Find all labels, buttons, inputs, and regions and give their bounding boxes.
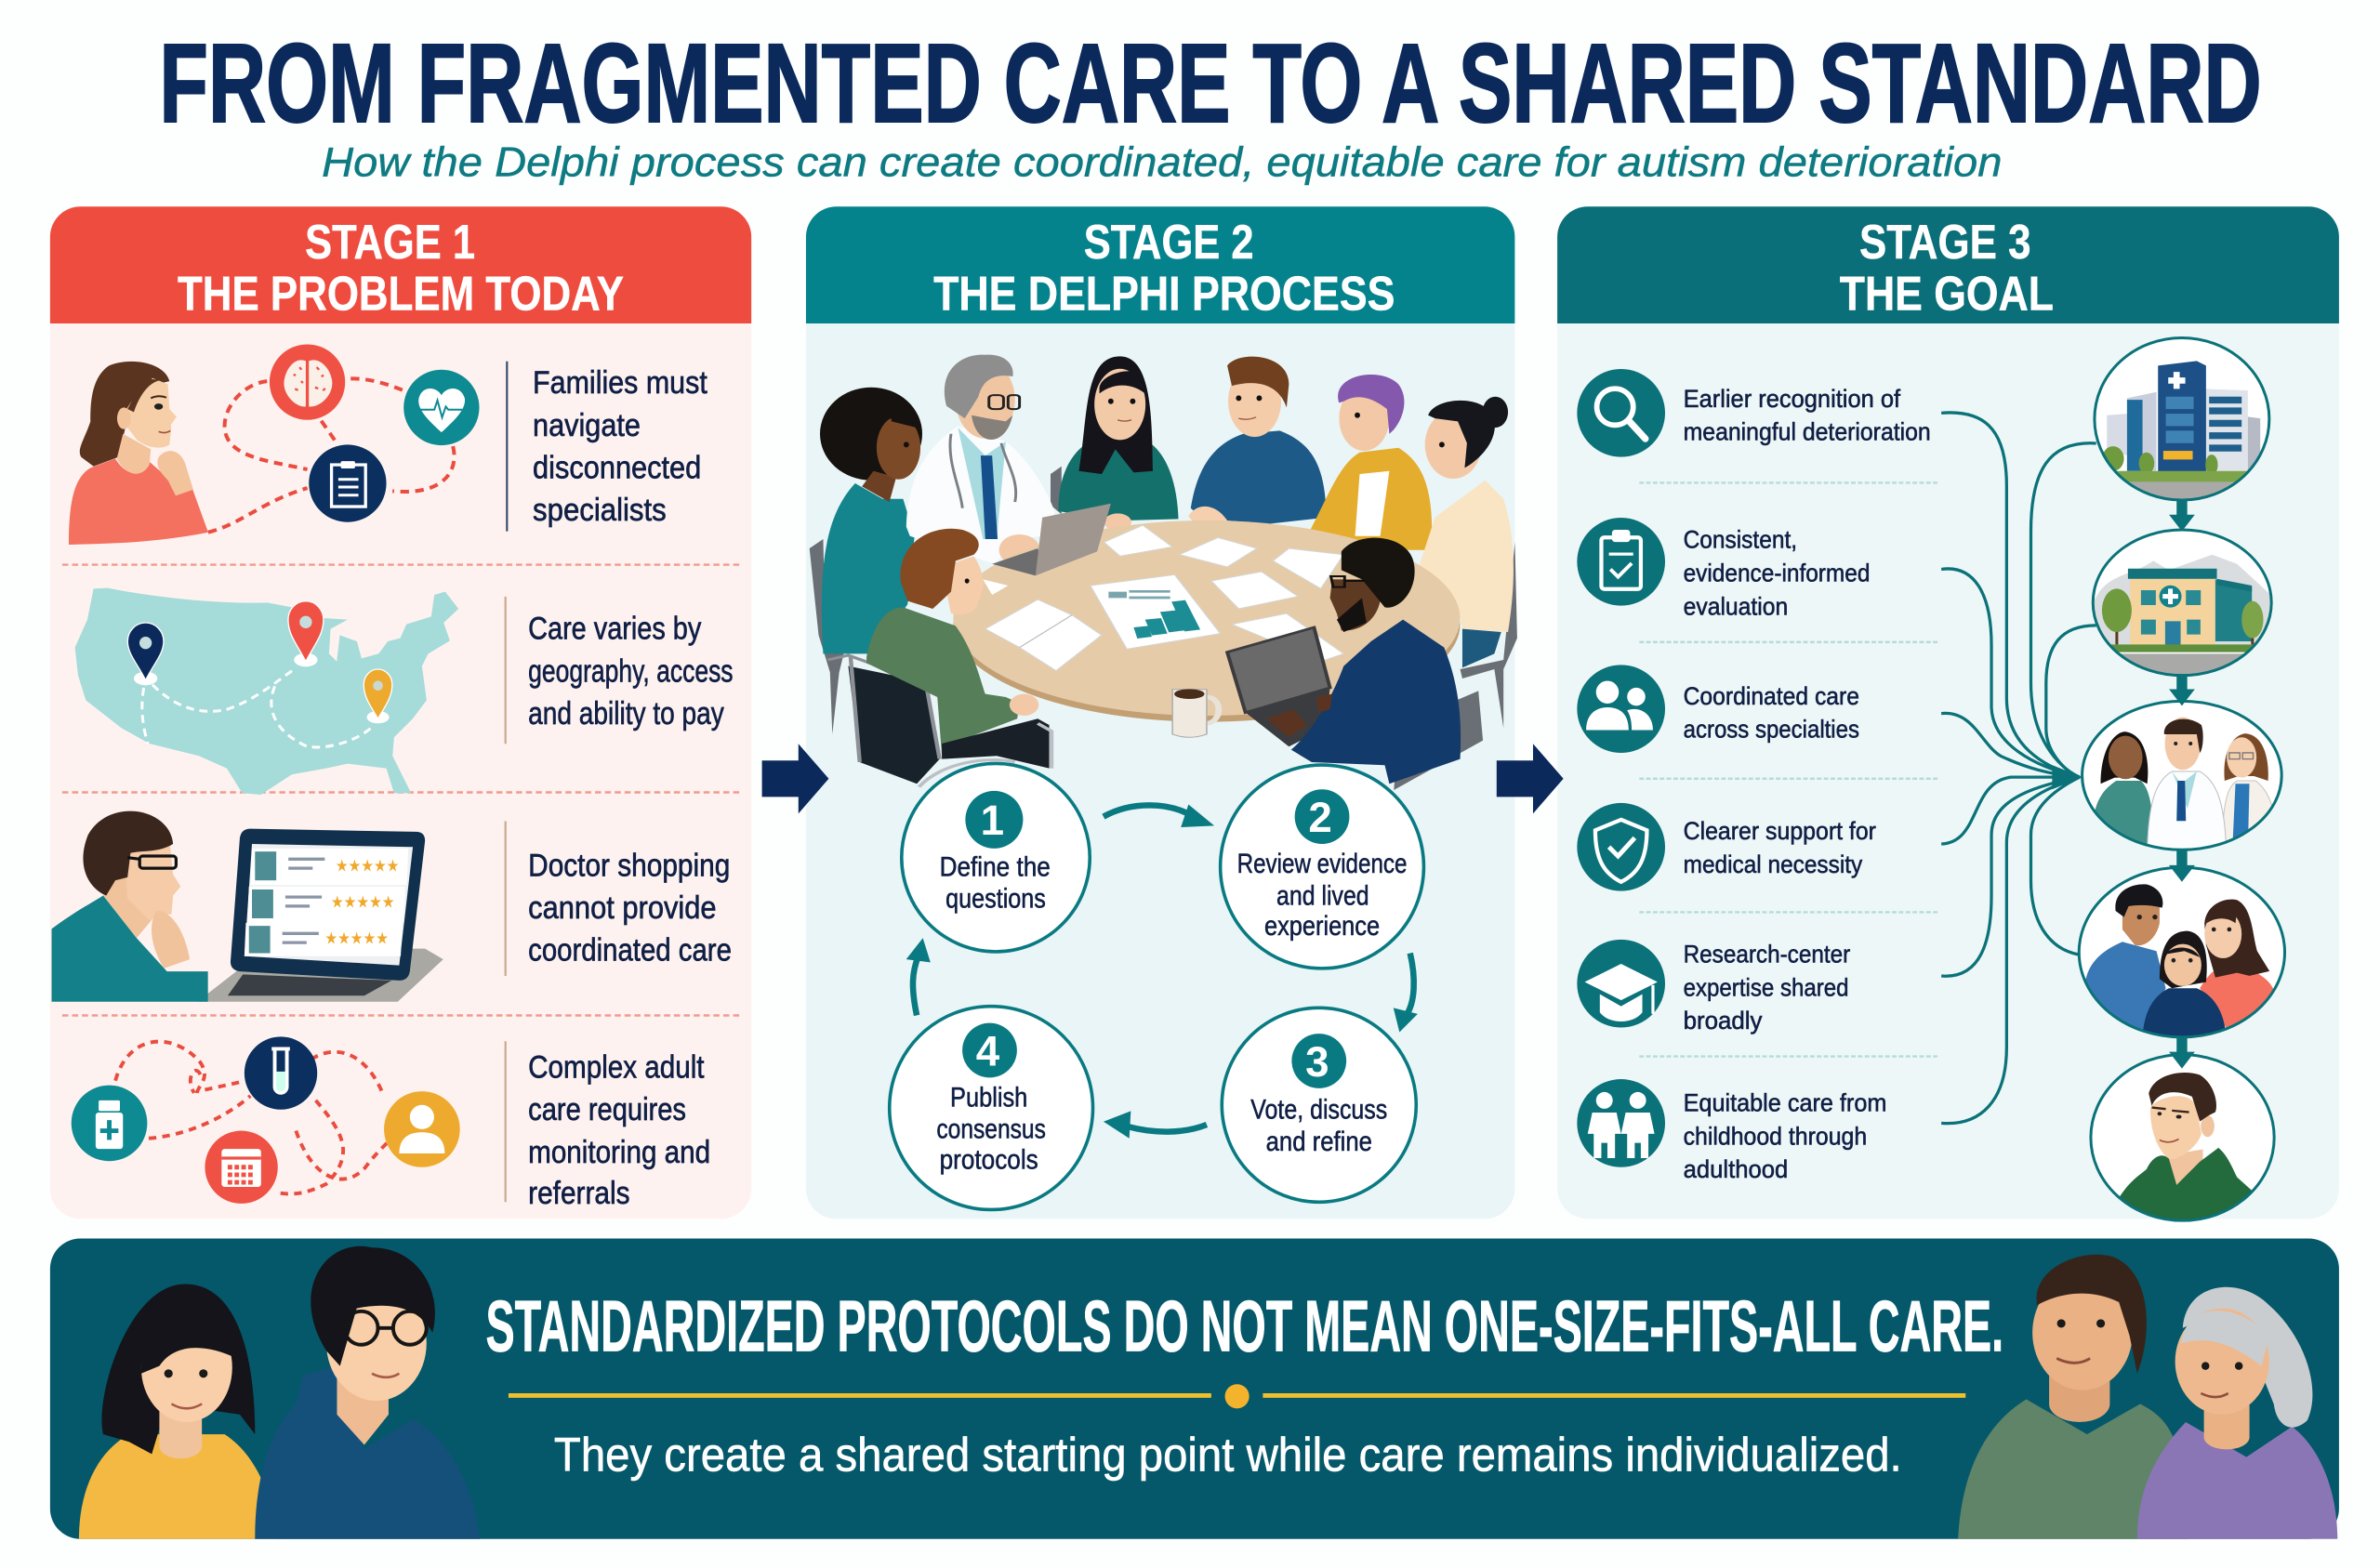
circle: clinic [2093,530,2274,679]
stage 2 header: STAGE 2 [1084,216,1254,270]
person: man in suit with laptop [1227,538,1461,784]
banner sub-headline: They create a shared starting point while care remains individualized. [554,1428,1902,1481]
row 1 illustration: woman navigating specialists [69,344,480,545]
icon: test tube [245,1036,317,1110]
step 4 circle: consensus [936,1114,1046,1145]
row 3 illustration: man comparing doctors on laptop [52,811,443,1002]
row 3 illustration: man comparing doctors on laptop: ★★★★★ [324,929,389,948]
person: girl in yellow sweater [79,1284,276,1539]
step 4 circle: Publish [950,1082,1027,1113]
cycle arrows [906,805,1418,1139]
illustration: clinicians and families around a table [810,355,1517,790]
person: man in navy sweater [1188,357,1327,541]
row 2 illustration: US map with pins [75,588,458,795]
circle: young adult [2091,1055,2274,1233]
goal item 2 [1577,518,1870,620]
panel: stage 1 the problem today [50,206,751,1219]
icon: clipboard [309,444,387,522]
goal item 6: Equitable care from [1684,1088,1886,1116]
step 4 circle [890,1007,1093,1209]
person: young man with glasses in blue hoodie [255,1246,480,1539]
goal item 6: adulthood [1684,1155,1788,1183]
step 2 circle: experience [1264,911,1380,942]
row 4 text [528,1049,710,1211]
row 1 text: Families must [533,365,707,401]
goal item 4 [1577,803,1876,891]
row 2 text: geography, access [528,653,734,689]
step 1 circle: questions [945,884,1046,915]
row 2 text [528,612,734,731]
row 4 text: monitoring and [528,1135,710,1170]
icon: navy pin [127,623,164,685]
goal item 5: Research-center [1684,940,1850,968]
stage 2 header [806,206,1514,323]
goal item 3 [1577,665,1859,753]
stage 3 header: STAGE 3 [1859,216,2030,270]
goal item 2: Consistent, [1684,526,1797,554]
person: older woman in purple sweater [2137,1287,2337,1539]
icon: coffee mug [1172,689,1219,737]
step 2 circle [1221,765,1423,968]
goal item 4: Clearer support for [1684,817,1876,845]
banner divider [509,1384,1965,1408]
icon: gold pin [364,669,392,723]
step 2 circle: 2 [1308,794,1332,841]
circle: care team [2082,701,2281,850]
stage 1 header [50,206,751,323]
step 3 circle [1222,1008,1416,1202]
person: doctor with grey hair [906,355,1055,565]
row 4 text: care requires [528,1092,686,1127]
papers and chart on the table [983,525,1343,671]
goal item 5: expertise shared [1684,973,1849,1001]
goal item 1: meaningful deterioration [1684,418,1931,446]
step 3 circle: Vote, discuss [1250,1095,1387,1126]
row 3 illustration: man comparing doctors on laptop: ★★★★★ [331,893,394,912]
row 1 text [533,365,707,528]
banner [50,1238,2339,1539]
subtitle: How the Delphi process can create coordinated, equitable care for autism deterioration [322,140,2002,186]
goal item 6: childhood through [1684,1122,1867,1150]
connector lines [1941,413,2096,1124]
step 4 circle: protocols [940,1144,1038,1175]
goal item 4: medical necessity [1684,850,1863,878]
laptop left [992,504,1111,575]
row 3 illustration: man comparing doctors on laptop: ★★★★★ [336,856,399,875]
goal item 3: across specialties [1684,716,1859,744]
chairs [810,467,1517,790]
goal item 5 [1577,940,1850,1034]
stage 1 header: STAGE 1 [305,216,475,270]
row 3 text: coordinated care [528,933,732,968]
row 3 text [528,848,732,968]
person: man in green sweater [1958,1255,2188,1539]
row 1 text: disconnected [533,451,701,486]
goal item 6 [1577,1079,1886,1183]
circle: family [2079,867,2285,1038]
icon: calendar [205,1131,278,1204]
row 2 text: Care varies by [528,612,702,647]
goal item 1: Earlier recognition of [1684,385,1901,413]
row 4 text: Complex adult [528,1049,705,1085]
icon: person [384,1091,460,1167]
row 4 text: referrals [528,1176,630,1211]
icon: heart [403,370,480,445]
step 3 circle: 3 [1305,1038,1329,1086]
pathway arrows [2169,500,2195,1069]
goal item 3: Coordinated care [1684,682,1859,710]
panel: stage 3 the goal [1557,206,2339,1233]
goal item 2: evidence-informed [1684,560,1870,587]
arrow: stage 1 to stage 2 [762,744,828,813]
stage 2 header: THE DELPHI PROCESS [933,267,1395,321]
icon: medicine bottle [72,1086,147,1161]
row 1 text: specialists [533,493,667,528]
stage 3 header: THE GOAL [1840,267,2054,321]
step 3 circle: and refine [1266,1127,1372,1157]
goal item 2: evaluation [1684,592,1788,620]
row 4 illustration: complex adult care icons [72,1036,460,1204]
panel: stage 2 the delphi process [806,206,1517,1219]
circles: hospital, clinic and care team [2082,337,2281,850]
person: woman in teal sweater [1058,356,1179,531]
person: woman with curly hair [820,388,922,653]
stage 3 header [1557,206,2339,323]
row 1 text: navigate [533,408,641,443]
table [953,520,1461,722]
person: woman with hair bun [1417,397,1514,667]
step 2 circle: Review evidence [1237,849,1407,879]
row 2 text: and ability to pay [528,696,724,731]
icon: red pin [288,601,324,666]
step 1 circle [902,763,1090,952]
step 1 circle: 1 [981,797,1004,844]
arrow: stage 2 to stage 3 [1497,744,1564,813]
row 3 text: Doctor shopping [528,848,730,883]
step 1 circle: Define the [940,851,1051,882]
goal item 1 [1577,369,1931,457]
circles: family and young adult [2079,867,2285,1233]
icon: brain [270,344,345,420]
goal item 5: broadly [1684,1007,1763,1034]
step 2 circle: and lived [1276,880,1369,911]
person: boy in wheelchair [827,529,1051,787]
step 4 circle: 4 [976,1027,1000,1074]
circle: hospital [2095,337,2269,505]
row 3 text: cannot provide [528,890,717,926]
stage 1 header: THE PROBLEM TODAY [178,267,624,321]
person: person with purple hair [1286,375,1432,560]
